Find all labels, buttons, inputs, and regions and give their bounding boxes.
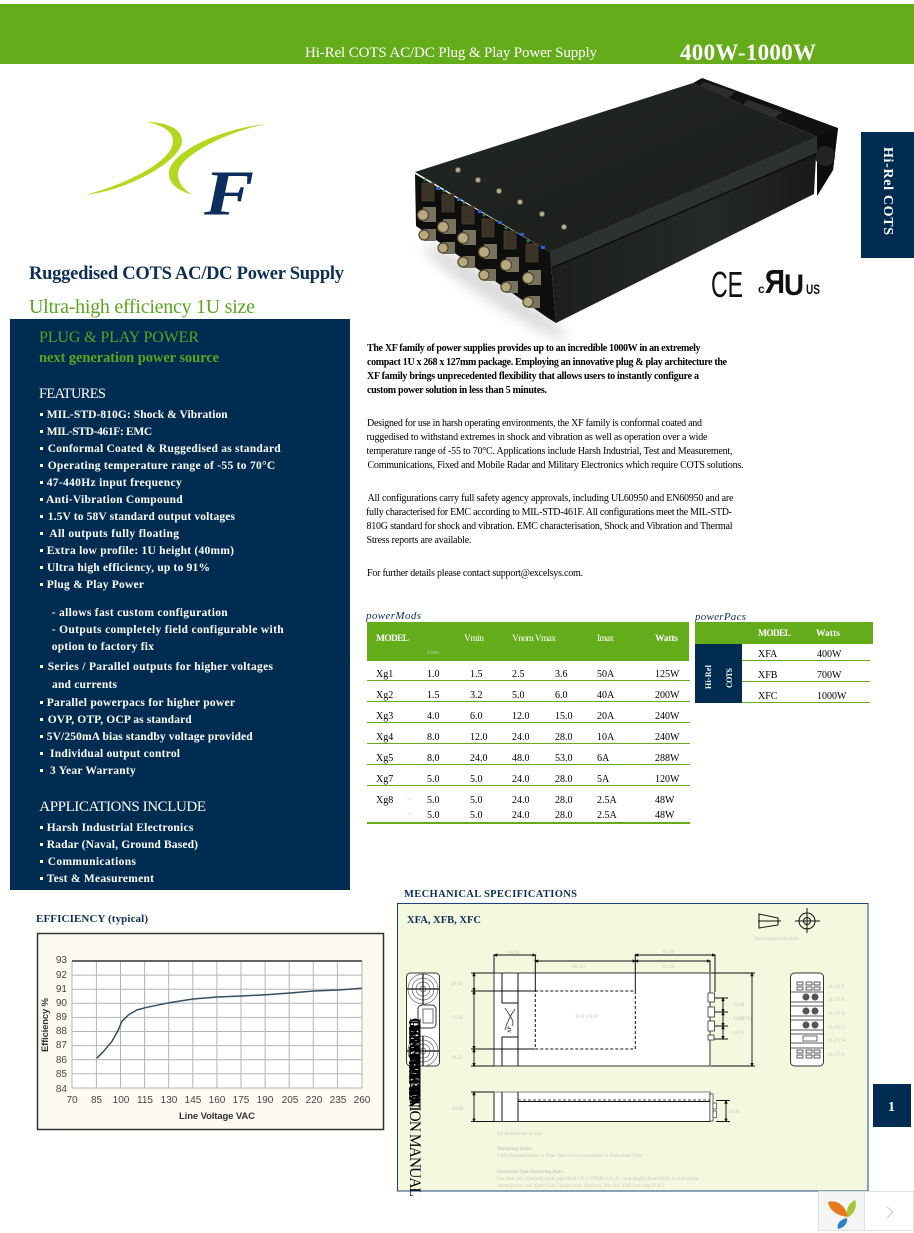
approvals paragraph: All configurations carry full safety agency approvals, including UL60950 and EN60950 and are <box>368 493 734 504</box>
table header <box>695 622 873 644</box>
side tab: Hi-Rel COTS: Hi-Rel COTS <box>880 147 895 235</box>
x axis labels: 70 <box>66 1095 78 1106</box>
row Xg1: 1.0 <box>427 669 440 680</box>
table header: Vmin <box>464 634 484 644</box>
efficiency curve <box>97 988 362 1058</box>
front face <box>415 174 556 323</box>
intro paragraph <box>367 343 728 396</box>
fan end <box>693 78 838 196</box>
dimension labels <box>451 950 846 1115</box>
applications list: Harsh Industrial Electronics <box>47 822 194 834</box>
dimension labels: 28.50 <box>451 1056 463 1061</box>
row Xg5: 8.0 <box>427 753 440 764</box>
panel subtitle: next generation power source <box>39 350 220 366</box>
table title: powerPacs <box>694 611 746 623</box>
mounting notes: 4 M3 threaded holes on Plate. Max screw penetration is 8mm from Plate. <box>497 1154 643 1159</box>
features list: OVP, OTP, OCP as standard <box>48 714 192 726</box>
row Xg8: 28.0 <box>555 810 572 821</box>
row Xg7: 5A <box>597 774 610 785</box>
features list: Series / Parallel outputs for higher voltages <box>48 661 274 673</box>
row XFA: XFA <box>758 649 778 660</box>
x axis labels: 160 <box>209 1095 226 1106</box>
dimension labels: SLOT B <box>828 1039 846 1044</box>
approvals paragraph: Stress reports are available. <box>366 535 472 546</box>
certification marks <box>711 264 820 305</box>
row Xg1: 3.6 <box>555 669 568 680</box>
design paragraph <box>366 418 744 471</box>
dimension labels: 85.00 <box>663 965 675 970</box>
approvals paragraph <box>366 493 734 546</box>
panel title: PLUG & PLAY POWER <box>39 329 199 346</box>
row Xg2: 6.0 <box>555 690 568 701</box>
y axis labels: 88 <box>56 1026 67 1037</box>
green subheading: Ultra-high efficiency 1U size <box>29 296 255 318</box>
top view: XP <box>508 1026 513 1033</box>
page number tab <box>873 1084 911 1127</box>
features heading: FEATURES <box>39 386 106 402</box>
XF logo <box>85 122 265 228</box>
features list: Parallel powerpacs for higher power <box>47 697 235 709</box>
dimension labels: SLOT A <box>828 1053 845 1058</box>
side view <box>471 1092 730 1122</box>
row Xg4: Xg4 <box>376 732 393 743</box>
row Xg2: 40A <box>597 690 615 701</box>
row Xg2: 3.2 <box>470 690 482 701</box>
dimension labels: 65.00 <box>452 1016 464 1021</box>
row Xg5: 53.0 <box>555 753 572 764</box>
applications list: Test & Measurement <box>47 873 154 885</box>
dimension labels: 28.50 <box>451 982 463 987</box>
dimension labels: 14.00 <box>733 1017 745 1022</box>
top view <box>471 955 755 1066</box>
table header: Vnom Vmax <box>512 634 556 644</box>
row XFC: XFC <box>758 691 778 702</box>
right end view <box>790 973 824 1066</box>
row Xg8: 5.0 <box>427 795 440 806</box>
row Xg8: 48W <box>655 810 675 821</box>
row Xg8: 48W <box>655 795 675 806</box>
features list <box>40 409 284 777</box>
features list: All outputs fully floating <box>49 528 179 540</box>
grid <box>72 961 362 1088</box>
Hi-Rel COTS cell <box>695 644 742 703</box>
panel: features <box>10 319 350 890</box>
table header <box>367 622 689 661</box>
applications list: Radar (Naval, Ground Based) <box>47 839 198 851</box>
header subtitle: Hi-Rel COTS AC/DC Plug & Play Power Supply <box>305 45 598 61</box>
row XFA <box>758 649 842 660</box>
mechanical heading: MECHANICAL SPECIFICATIONS <box>404 889 577 900</box>
x axis labels: 220 <box>306 1095 323 1106</box>
dimension labels: SLOT D <box>828 1012 846 1017</box>
intro paragraph: compact 1U x 268 x 127mm package. Employing an innovative plug & play architecture the <box>367 357 728 368</box>
dimension labels: 26.00 <box>728 1110 740 1115</box>
x axis labels: 260 <box>354 1095 371 1106</box>
drawing title: XFA, XFB, XFC <box>407 915 481 926</box>
row Xg2: Xg2 <box>376 690 393 701</box>
product photo <box>415 78 838 348</box>
applications list: Communications <box>48 856 137 868</box>
y axis labels: 85 <box>56 1069 67 1080</box>
x axis labels: 100 <box>113 1095 130 1106</box>
x axis labels: 175 <box>233 1095 250 1106</box>
features list: Plug & Play Power <box>47 579 144 591</box>
header band <box>0 4 914 65</box>
features list: 3 Year Warranty <box>50 765 136 777</box>
row XFB: XFB <box>758 670 778 681</box>
y axis labels <box>56 955 67 1095</box>
row Xg4: 28.0 <box>555 732 572 743</box>
side tab: Hi-Rel COTS <box>861 132 914 258</box>
intro paragraph: custom power solution in less than 5 minutes. <box>367 385 548 396</box>
row Xg3: 240W <box>655 711 680 722</box>
table header: Vtrim <box>427 651 439 656</box>
row Xg2: 5.0 <box>512 690 524 701</box>
row Xg7: 5.0 <box>470 774 482 785</box>
design paragraph: Designed for use in harsh operating environments, the XF family is conformal coated and <box>367 418 702 429</box>
certification marks: c <box>758 282 765 296</box>
x axis labels: 190 <box>257 1095 274 1106</box>
viewer widget <box>818 1192 914 1230</box>
row Xg1: 50A <box>597 669 615 680</box>
top plate screws <box>456 168 566 230</box>
Hi-Rel COTS cell: COTS <box>725 667 734 688</box>
y axis labels: 93 <box>56 955 67 966</box>
features list: Individual output control <box>50 748 180 760</box>
row Xg4 <box>376 732 680 743</box>
row Xg8: V1 <box>407 796 412 801</box>
Hi-Rel COTS cell: Hi-Rel <box>704 664 713 689</box>
features list: Anti-Vibration Compound <box>46 494 183 506</box>
table header: MODEL <box>758 629 791 639</box>
powerPacs table <box>694 611 873 703</box>
row Xg5 <box>376 753 680 764</box>
row Xg8: V2 <box>407 811 412 816</box>
dimension labels: 94.00 <box>508 951 520 956</box>
x axis title: Line Voltage VAC <box>179 1111 255 1122</box>
icon: third angle projection <box>758 908 820 933</box>
features list: 5V/250mA bias standby voltage provided <box>47 731 253 743</box>
intro paragraph: The XF family of power supplies provides up to an incredible 1000W in an extremely <box>367 343 700 354</box>
x axis labels: 130 <box>161 1095 178 1106</box>
header wattage range: 400W-1000W <box>680 40 816 65</box>
dimension labels: 40.00 <box>452 1107 464 1112</box>
top view: TOP VIEW <box>575 1015 599 1020</box>
row Xg8: 24.0 <box>512 795 530 806</box>
row Xg5: 24.0 <box>470 753 488 764</box>
certification marks: R <box>765 264 785 301</box>
row Xg3: 4.0 <box>427 711 440 722</box>
powerMods table <box>365 610 690 824</box>
mounting notes: Use rack self-clinching studs type PEM LX or PEMS-LX (X= stud length) from PEM, or equivalent. <box>497 1177 699 1182</box>
features list: option to factory fix <box>52 641 154 653</box>
dimension labels: 14.00 <box>733 1031 745 1036</box>
terminal screws <box>418 210 534 307</box>
row Xg5: Xg5 <box>376 753 393 764</box>
top face <box>415 83 817 252</box>
row Xg2: 1.5 <box>427 690 440 701</box>
row Xg7: 120W <box>655 774 680 785</box>
certification marks: US <box>806 281 820 297</box>
design paragraph: Communications, Fixed and Mobile Radar and Military Electronics which require COTS solutions. <box>368 460 744 471</box>
efficiency heading: EFFICIENCY (typical) <box>36 913 148 925</box>
row Xg1: 1.5 <box>470 669 482 680</box>
x axis labels: 115 <box>137 1095 153 1106</box>
row Xg3: Xg3 <box>376 711 393 722</box>
row Xg8: 28.0 <box>555 795 572 806</box>
row Xg8: Xg8 <box>376 795 393 806</box>
features list: - allows fast custom configuration <box>52 607 228 619</box>
approvals paragraph: fully characterised for EMC according to MIL-STD-461F. All configurations meet the MIL-STD- <box>366 507 732 518</box>
y axis labels: 89 <box>56 1012 67 1023</box>
row Xg8 <box>376 795 675 821</box>
features list: Operating temperature range of -55 to 70°C <box>48 460 275 472</box>
overflowing rotated manual text: REFER TO APPLICATION <box>405 1020 422 1108</box>
row Xg1: 125W <box>655 669 680 680</box>
features list: 47-440Hz input frequency <box>47 477 182 489</box>
features list: - Outputs completely field configurable with <box>52 624 284 636</box>
row Xg2: 200W <box>655 690 680 701</box>
applications heading: APPLICATIONS INCLUDE <box>39 799 206 815</box>
features list: Conformal Coated & Ruggedised as standard <box>48 443 281 455</box>
y axis labels: 84 <box>56 1084 67 1095</box>
y axis labels: 91 <box>56 984 67 995</box>
row Xg1: Xg1 <box>376 669 393 680</box>
x axis labels: 145 <box>185 1095 202 1106</box>
row XFB <box>758 670 842 681</box>
connectors <box>422 183 538 262</box>
dimension labels: 105.00 <box>571 965 585 970</box>
row Xg4: 10A <box>597 732 615 743</box>
row Xg8: 5.0 <box>470 810 482 821</box>
y axis labels: 86 <box>56 1055 67 1066</box>
certification marks: U <box>784 269 804 302</box>
dimension labels: SLOT E <box>828 998 845 1003</box>
row Xg2 <box>376 690 680 701</box>
approvals paragraph: 810G standard for shock and vibration. EMC characterisation, Shock and Vibration and Thermal <box>366 521 733 532</box>
table header: Watts <box>816 629 840 639</box>
row Xg8: 5.0 <box>470 795 482 806</box>
left end view <box>406 973 440 1066</box>
design paragraph: ruggedised to withstand extremes in shock and vibration as well as operation over a wide <box>366 432 708 443</box>
connector bumps <box>708 993 714 1040</box>
row Xg7: 5.0 <box>427 774 440 785</box>
row Xg5: 288W <box>655 753 680 764</box>
features list: MIL-STD-461F: EMC <box>47 426 152 438</box>
row Xg8: 2.5A <box>597 810 618 821</box>
row Xg3 <box>376 711 680 722</box>
row Xg8: 5.0 <box>427 810 440 821</box>
main heading: Ruggedised COTS AC/DC Power Supply <box>29 264 345 284</box>
certification marks: CE <box>711 264 743 305</box>
row XFA: 400W <box>817 649 842 660</box>
overflowing rotated manual text: DESIGN AND INSTALLATION <box>406 1018 423 1108</box>
mounting notes: All dimensions in mm. <box>497 1132 543 1137</box>
blue and green indicators <box>436 187 545 249</box>
row Xg3: 20A <box>597 711 615 722</box>
row Xg4: 8.0 <box>427 732 440 743</box>
features list: MIL-STD-810G: Shock & Vibration <box>47 409 228 421</box>
table header: MODEL <box>376 634 409 644</box>
dimension labels: 14.00 <box>733 1003 745 1008</box>
features list: Extra low profile: 1U height (40mm) <box>47 545 234 557</box>
row Xg1: 2.5 <box>512 669 524 680</box>
terminal plates <box>423 207 541 308</box>
intro paragraph: XF family brings unprecedented flexibility that allows users to instantly configure a <box>367 371 699 382</box>
table title: powerMods <box>365 610 421 622</box>
design paragraph: temperature range of -55 to 70°C. Applications include Harsh Industrial, Test and Measurement, <box>366 446 732 457</box>
row Xg4: 24.0 <box>512 732 530 743</box>
row Xg5: 6A <box>597 753 610 764</box>
y axis labels: 90 <box>56 998 67 1009</box>
features list: Ultra high efficiency, up to 91% <box>47 562 210 574</box>
x axis labels: 85 <box>91 1095 102 1106</box>
side face <box>550 137 817 323</box>
dimension labels: SLOT F <box>828 985 845 990</box>
row Xg7: 24.0 <box>512 774 530 785</box>
row Xg8: 2.5A <box>597 795 618 806</box>
table header: Imax <box>597 634 614 644</box>
row XFC <box>758 691 847 702</box>
mounting notes: Perimeter Side Mounting Slots: <box>497 1170 565 1175</box>
mounting notes: Mounting Holes: <box>497 1147 533 1152</box>
small logo on drawing <box>505 1008 515 1030</box>
efficiency line chart <box>38 934 384 1130</box>
mounting notes <box>497 1132 699 1189</box>
panel: mechanical drawing: Third angle projection <box>754 937 799 942</box>
row Xg1 <box>376 669 680 680</box>
table header: Watts <box>655 634 678 644</box>
mounting notes: Alternatively, use Xpert Side Clamps from Harrison, Part No. 2389 (see mtg 87-07). <box>497 1184 666 1189</box>
dimension labels: 85.39 <box>663 950 675 955</box>
features list: and currents <box>52 679 118 691</box>
row Xg7: Xg7 <box>376 774 393 785</box>
icon: next chevron <box>887 1207 893 1218</box>
y axis labels: 87 <box>56 1040 67 1051</box>
row XFB: 700W <box>817 670 842 681</box>
dimension labels: 127.00 <box>738 1017 752 1022</box>
x axis labels: 235 <box>330 1095 347 1106</box>
y axis labels: 92 <box>56 970 67 981</box>
icon: viewer logo <box>828 1200 856 1229</box>
row Xg4: 12.0 <box>470 732 488 743</box>
row Xg4: 240W <box>655 732 680 743</box>
row Xg3: 12.0 <box>512 711 530 722</box>
row Xg8: 24.0 <box>512 810 530 821</box>
applications list <box>40 822 198 885</box>
overflowing rotated manual text: CONFIGURATION MANUAL <box>406 1018 423 1197</box>
XF logo: F <box>203 158 254 228</box>
overflowing rotated manual text: SEE XF PRODUCT SECTION <box>406 1024 423 1104</box>
row Xg7: 28.0 <box>555 774 572 785</box>
y axis title: Efficiency % <box>40 997 51 1052</box>
row Xg3: 15.0 <box>555 711 572 722</box>
row Xg5: 48.0 <box>512 753 530 764</box>
features list: 1.5V to 58V standard output voltages <box>48 511 236 523</box>
panel: mechanical drawing <box>398 904 868 1197</box>
row XFC: 1000W <box>817 691 847 702</box>
page number tab: 1 <box>888 1100 895 1115</box>
contact line: For further details please contact support@excelsys.com. <box>367 568 583 579</box>
x axis labels <box>66 1095 371 1106</box>
x axis labels: 205 <box>282 1095 299 1106</box>
dimension labels: SLOT C <box>828 1026 846 1031</box>
row Xg7 <box>376 774 680 785</box>
row Xg3: 6.0 <box>470 711 482 722</box>
